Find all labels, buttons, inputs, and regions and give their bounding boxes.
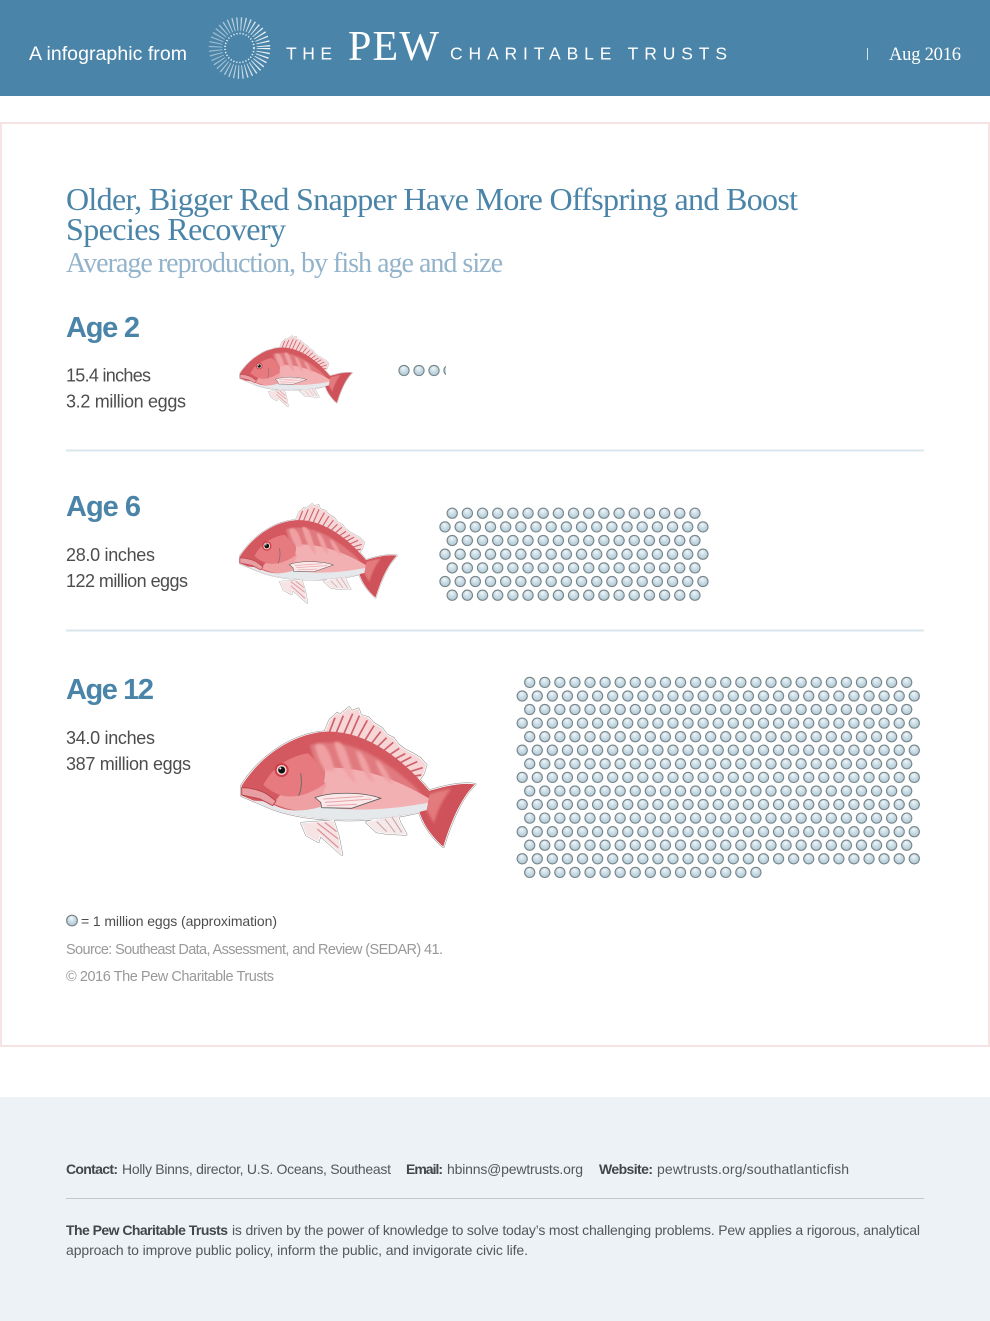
source note: Source: Southeast Data, Assessment, and Review (SEDAR) 41.: [66, 942, 443, 958]
contact line: Contact:: [66, 1161, 118, 1177]
section: age 2: [66, 312, 454, 412]
contact line: Email:: [406, 1161, 443, 1177]
eggs: 122 million: [440, 508, 708, 600]
Pew wordmark: CHARITABLE TRUSTS: [450, 44, 727, 64]
legend: = 1 million eggs (approximation): [81, 913, 277, 929]
title: [66, 181, 798, 247]
illustration: age 12 fish: [242, 708, 475, 854]
copyright: © 2016 The Pew Charitable Trusts: [66, 969, 274, 985]
Pew wordmark: PEW: [348, 24, 439, 70]
stats: age 6: 28.0 inches: [66, 545, 155, 565]
header lead-in text: A infographic from: [29, 43, 187, 65]
about text: The Pew Charitable Trusts: [66, 1222, 228, 1238]
about text: approach to improve public policy, inform the public, and invigorate civic life.: [66, 1242, 528, 1258]
stats: age 6: 122 million eggs: [66, 571, 188, 591]
contact line: [66, 1161, 849, 1177]
subtitle: Average reproduction, by fish age and size: [66, 248, 503, 279]
icon: Pew sunburst logo: [216, 24, 264, 72]
contact line: pewtrusts.org/southatlanticfish: [657, 1161, 849, 1177]
Pew wordmark: [286, 24, 727, 70]
contact line: Website:: [599, 1161, 653, 1177]
stats: age 12: 387 million eggs: [66, 754, 191, 774]
title: Older, Bigger Red Snapper Have More Offspring and Boost: [66, 181, 798, 217]
section: age 6: [66, 491, 708, 603]
section: age 12: [66, 674, 919, 878]
eggs: 387 million: [517, 677, 919, 878]
Pew wordmark: THE: [286, 44, 332, 64]
title: Species Recovery: [66, 211, 286, 247]
illustration: age 6 fish: [240, 504, 397, 603]
stats: age 2: 3.2 million eggs: [66, 392, 186, 412]
heading: age 2: Age 2: [66, 312, 140, 344]
heading: age 6: Age 6: [66, 491, 141, 523]
header band: [0, 0, 990, 96]
stats: age 2: [66, 366, 186, 412]
heading: age 12: Age 12: [66, 674, 154, 706]
about text: is driven by the power of knowledge to solve today’s most challenging problems. Pew applies a rigorous, analytical: [232, 1222, 920, 1238]
header date: Aug 2016: [889, 45, 961, 65]
main panel: [1, 123, 989, 1046]
footer panel: [0, 1097, 990, 1321]
about text: [66, 1222, 920, 1258]
contact line: Holly Binns, director, U.S. Oceans, Southeast: [122, 1161, 391, 1177]
stats: age 6: [66, 545, 188, 591]
stats: age 12: [66, 728, 191, 774]
illustration: age 2 fish: [240, 336, 352, 406]
contact line: hbinns@pewtrusts.org: [447, 1161, 583, 1177]
stats: age 2: 15.4 inches: [66, 366, 151, 386]
stats: age 12: 34.0 inches: [66, 728, 155, 748]
eggs: 3.2 million: [399, 365, 454, 376]
